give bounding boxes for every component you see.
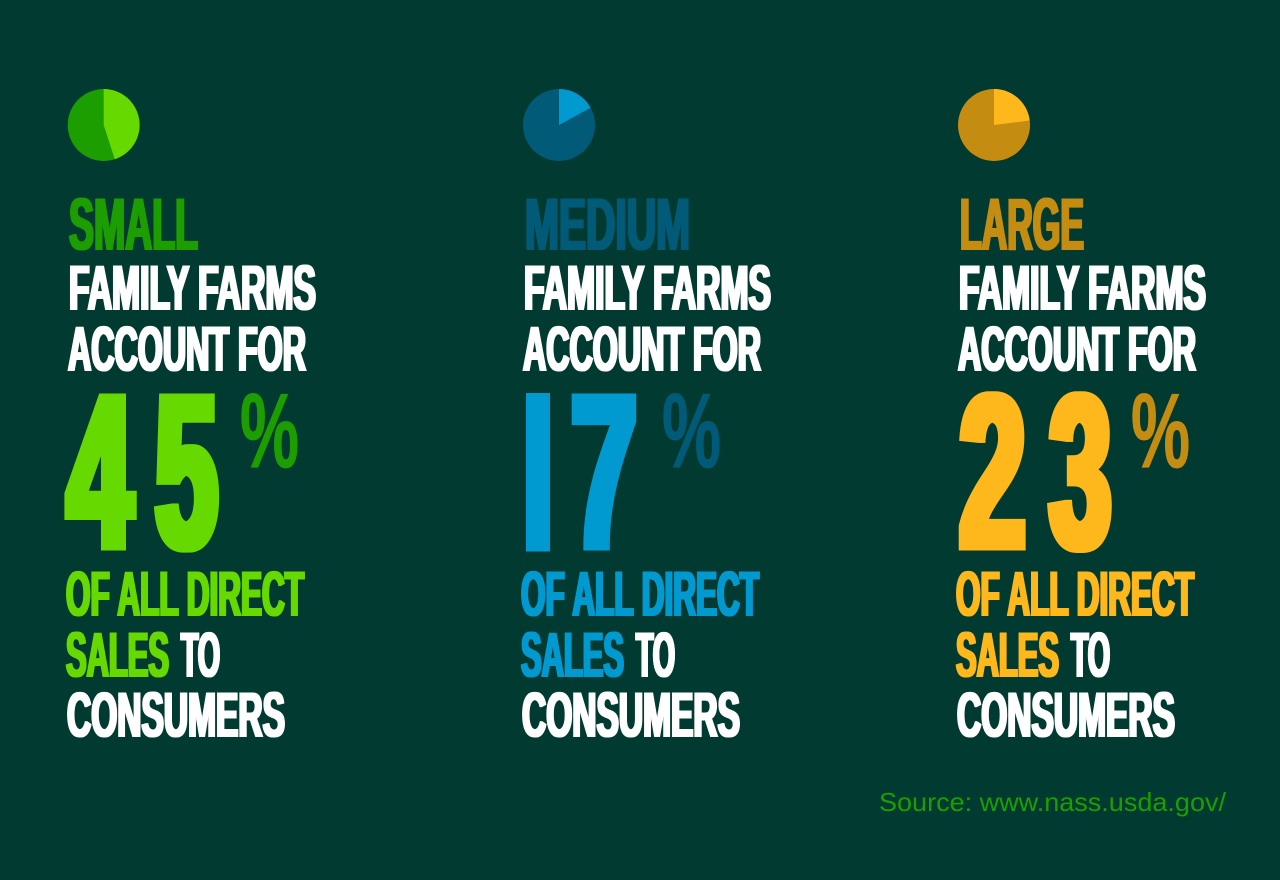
panel: medium family farms [521, 89, 771, 750]
number: 45 percent: 5 [156, 351, 218, 594]
text: family farms account for: FAMILY FARMS [69, 254, 316, 324]
text: family farms account for: FAMILY FARMS [524, 254, 771, 324]
panel: large family farms: LARGE [960, 184, 1084, 266]
text: family farms account for [68, 254, 316, 384]
number: 45 percent: 4 [68, 351, 132, 594]
heading: medium: MEDIUM [525, 184, 690, 266]
text: of all direct sales to consumers: CONSUMERS [522, 680, 740, 750]
icon: pie chart 45% [68, 89, 140, 161]
text: of all direct sales to consumers: SALES [521, 620, 624, 690]
text: of all direct sales to consumers [521, 560, 759, 750]
text: of all direct sales to consumers: TO [1071, 620, 1110, 690]
panel: small family farms [66, 89, 316, 750]
number: 23 percent: % [1131, 372, 1190, 490]
number: 23 percent: 2 [960, 351, 1026, 594]
text: of all direct sales to consumers: OF ALL DIRECT [521, 560, 759, 630]
source note: Source: www.nass.usda.gov/ [879, 787, 1227, 817]
heading: small: SMALL [69, 184, 198, 266]
number: 17 percent [526, 393, 720, 552]
number: 23 percent: 3 [1050, 351, 1111, 594]
panel: large family farms [956, 89, 1206, 750]
text: of all direct sales to consumers [956, 560, 1194, 750]
text: family farms account for [523, 254, 771, 384]
text: family farms account for: ACCOUNT FOR [523, 314, 761, 384]
number: 17 percent: 1 [524, 354, 549, 590]
text: of all direct sales to consumers: SALES [66, 620, 169, 690]
text: of all direct sales to consumers: TO [181, 620, 220, 690]
icon: pie chart 17% [523, 89, 595, 161]
number: 45 percent: % [240, 372, 299, 490]
number: 45 percent [68, 351, 299, 594]
text: family farms account for [958, 254, 1206, 384]
number: 17 percent: % [662, 372, 721, 490]
text: of all direct sales to consumers: CONSUMERS [67, 680, 285, 750]
text: of all direct sales to consumers: TO [636, 620, 675, 690]
number: 17 percent: 7 [572, 351, 636, 594]
text: of all direct sales to consumers [66, 560, 304, 750]
text: of all direct sales to consumers: OF ALL DIRECT [66, 560, 304, 630]
icon: pie chart 23% [958, 89, 1030, 161]
text: family farms account for: ACCOUNT FOR [68, 314, 306, 384]
text: of all direct sales to consumers: SALES [956, 620, 1059, 690]
number: 23 percent [960, 351, 1190, 594]
